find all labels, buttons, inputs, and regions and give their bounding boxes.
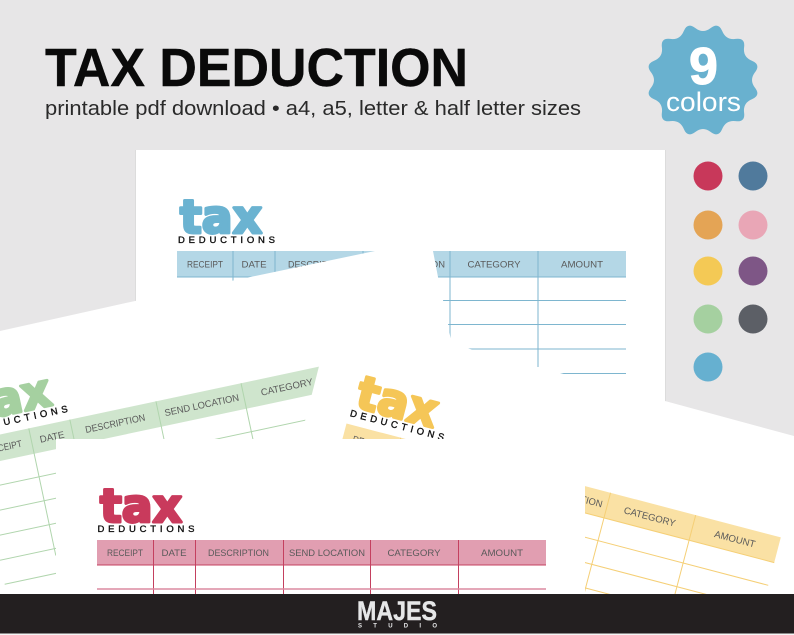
yellow table: CATEGORY (623, 505, 677, 530)
pink table: CATEGORY (388, 548, 441, 559)
blue table: AMOUNT (561, 260, 603, 270)
blue table: SEND LOCATION (369, 260, 445, 270)
panel: blue sheet (135, 150, 666, 450)
brand logo: STUDIO (358, 624, 437, 630)
green table (0, 366, 319, 585)
pink logo: DEDUCTIONS (98, 524, 194, 535)
yellow table: DATE (404, 448, 431, 465)
yellow table: RECEIPT (351, 434, 389, 454)
yellow table: SEND LOCATION (527, 480, 604, 510)
blue logo: tax (180, 190, 262, 244)
panel: green sheet (0, 366, 319, 585)
green logo (0, 378, 68, 425)
brand logo: MAJES (357, 596, 437, 626)
pink table: DATE (162, 548, 186, 559)
subtitle: printable pdf download • a4, a5, letter & half letter sizes (45, 97, 581, 120)
yellow table: AMOUNT (713, 529, 757, 550)
panel: pink sheet (56, 439, 585, 600)
yellow logo: tax (351, 365, 444, 438)
blue table: DESCRIPTION (288, 260, 349, 270)
panel: yellow sheet (305, 364, 794, 635)
badge: 9 colors: 9 (689, 38, 718, 96)
badge: 9 colors (649, 26, 757, 134)
footer bar (0, 594, 794, 635)
pink table: SEND LOCATION (289, 548, 365, 559)
blue logo: DEDUCTIONS (178, 235, 275, 246)
colour swatches (694, 162, 768, 382)
blue table: DATE (242, 260, 266, 270)
green table: CATEGORY (260, 377, 315, 399)
yellow logo: DEDUCTIONS (349, 408, 445, 444)
yellow table (305, 424, 781, 635)
pink table: RECEIPT (107, 548, 143, 559)
blue table (177, 251, 626, 381)
pink table: AMOUNT (481, 548, 523, 559)
pink table (97, 540, 546, 600)
green table: DESCRIPTION (84, 413, 146, 436)
pink table: DESCRIPTION (208, 548, 269, 559)
blue table: CATEGORY (468, 260, 521, 270)
panel: white overlapping sheets (0, 239, 794, 600)
green table: DATE (39, 430, 66, 446)
yellow table: DESCRIPTION (449, 460, 511, 486)
green table: SEND LOCATION (164, 393, 240, 419)
pink logo: tax (100, 479, 182, 533)
badge: 9 colors: colors (666, 87, 741, 117)
title: TAX DEDUCTION (45, 38, 468, 98)
blue table: RECEIPT (187, 260, 223, 270)
